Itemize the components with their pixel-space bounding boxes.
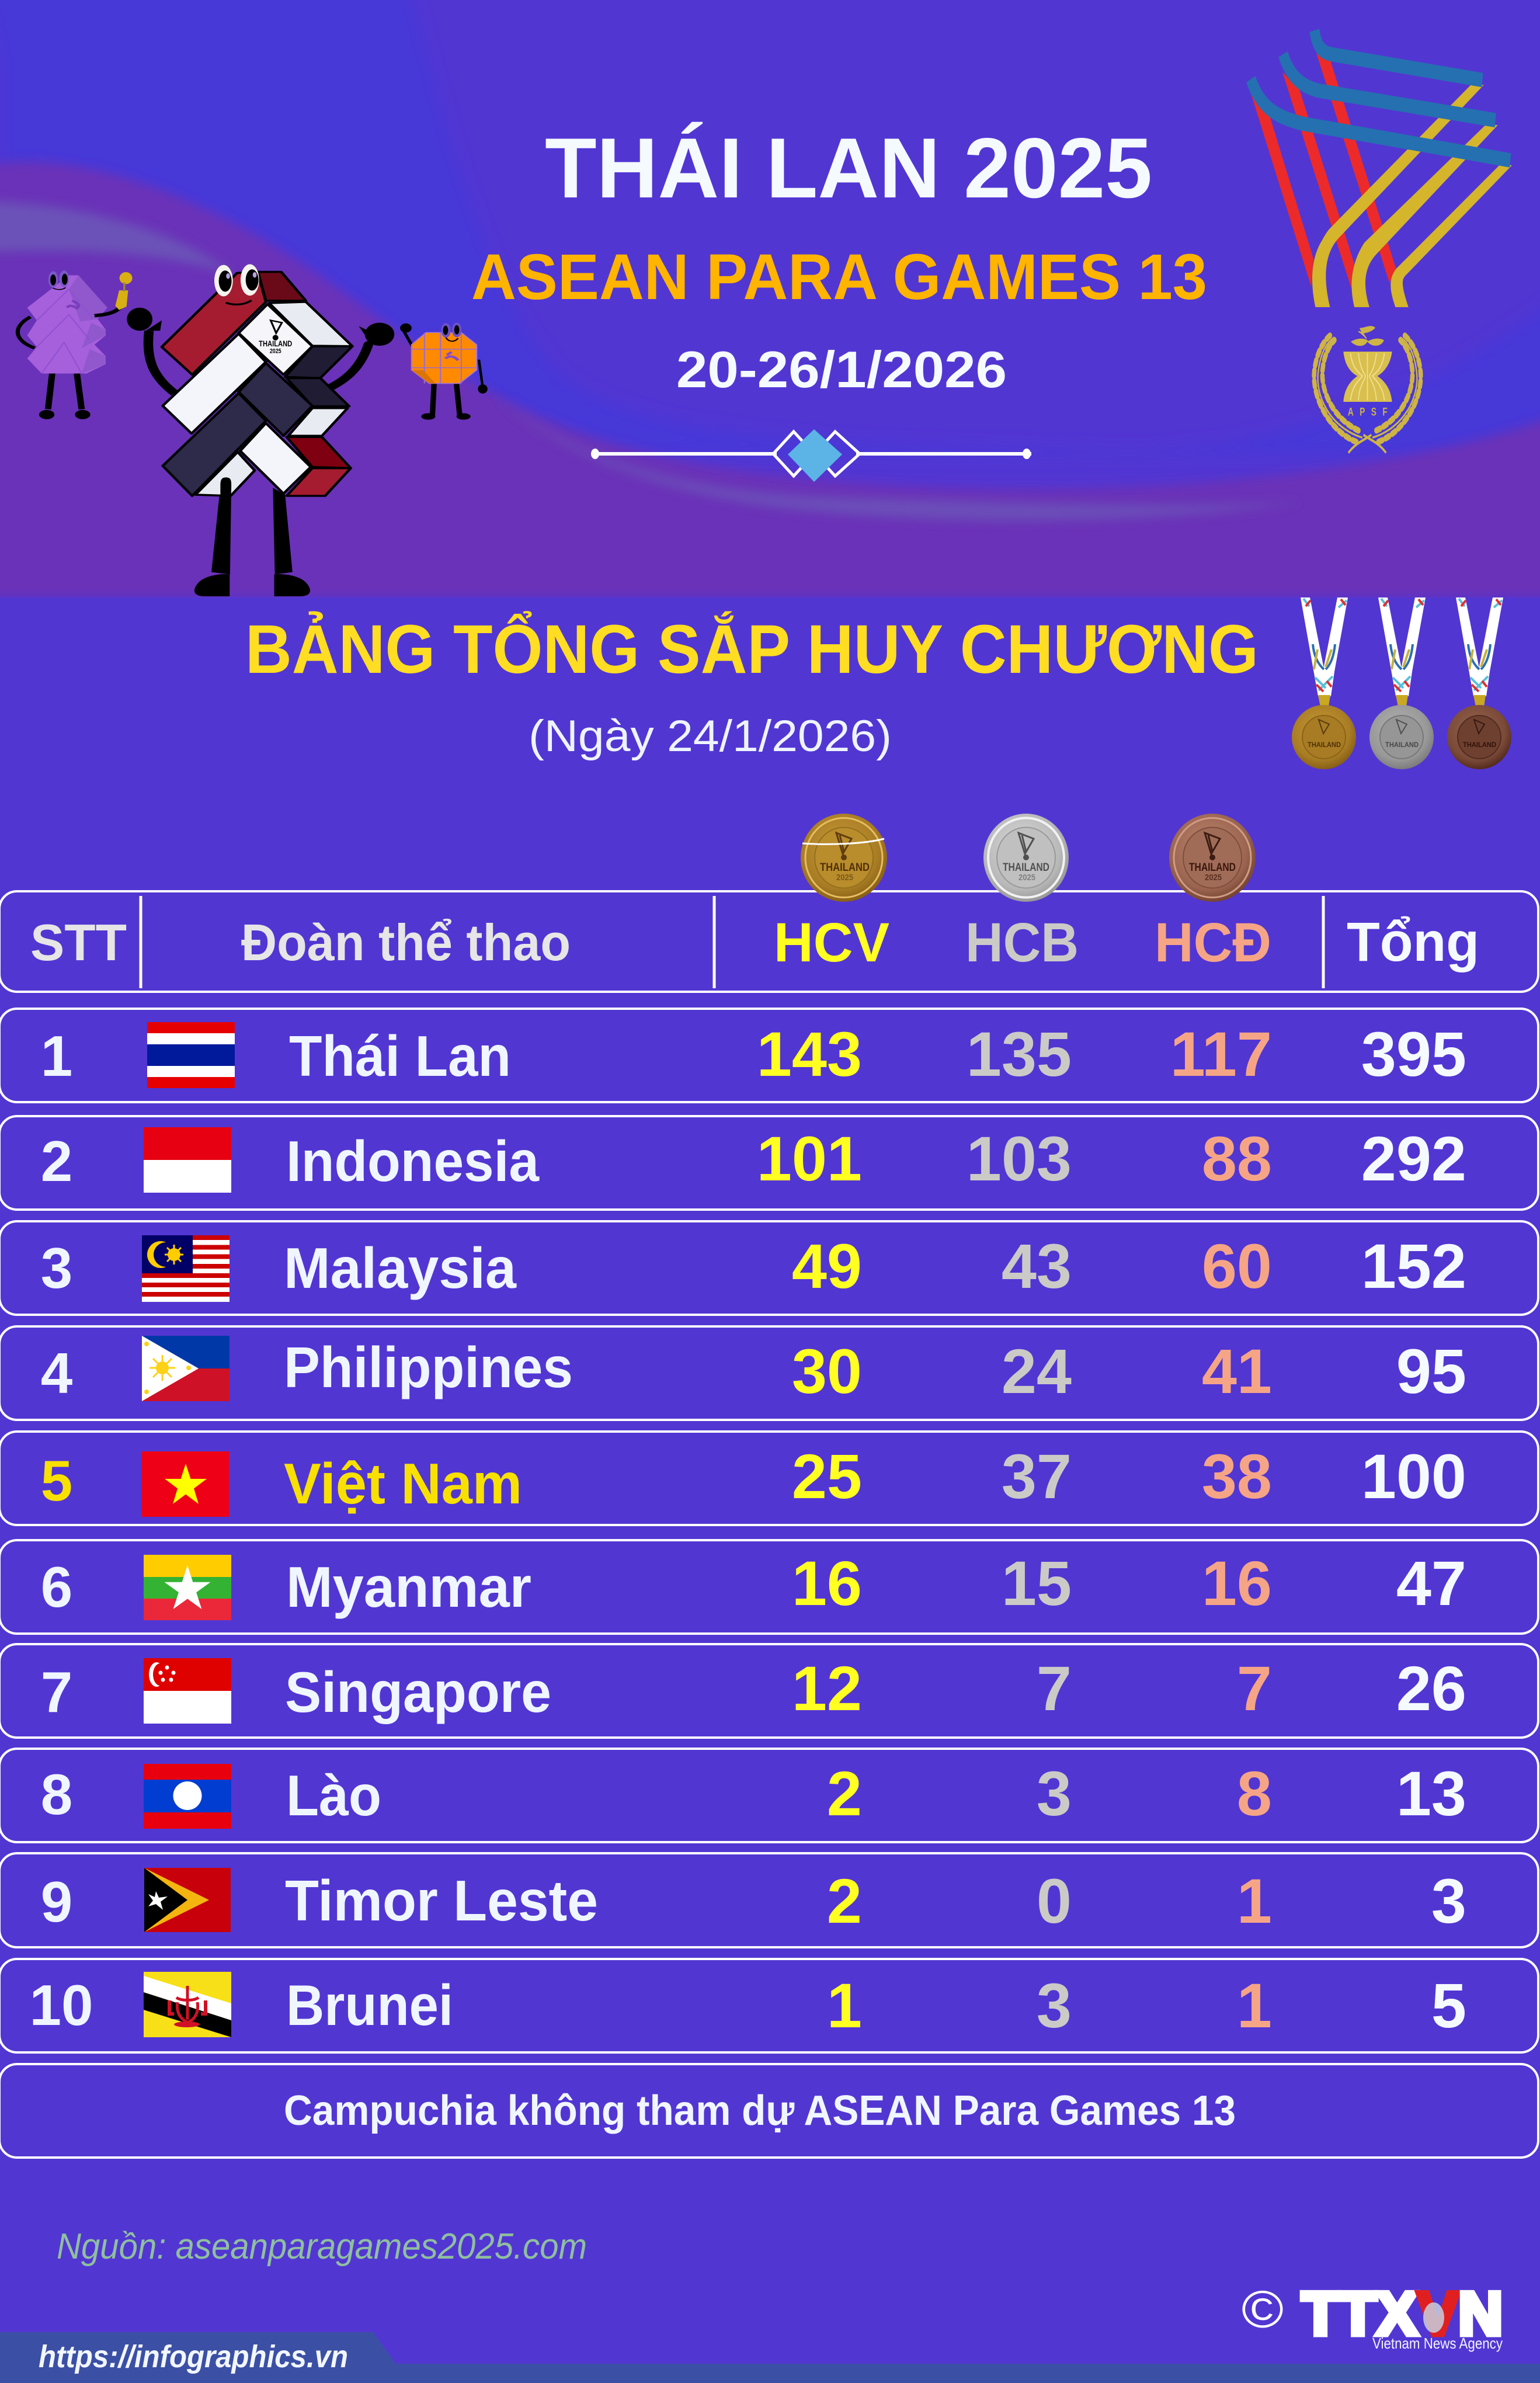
icon: right orange mascot bbox=[400, 322, 488, 420]
flag: Indonesia bbox=[144, 1127, 231, 1193]
row 8: Lào: 8 bbox=[41, 1762, 72, 1826]
flag: Vietnam bbox=[141, 1451, 229, 1517]
row 1: Thái Lan: Thái Lan bbox=[289, 1024, 511, 1088]
table header row: Đoàn thể thao bbox=[241, 913, 571, 971]
row 3: Malaysia: 60 bbox=[1202, 1231, 1272, 1301]
table header row: HCV bbox=[774, 912, 889, 974]
flag: Singapore bbox=[144, 1658, 231, 1724]
row 4: Philippines bbox=[0, 1326, 1538, 1420]
table header row: HCB bbox=[965, 912, 1079, 974]
row 5: Việt Nam (highlighted): Việt Nam bbox=[284, 1451, 522, 1516]
icon: Thailand 2025 games logo bbox=[1251, 30, 1512, 307]
date note: (Ngày 24/1/2026) bbox=[529, 711, 892, 761]
flag: Timor Leste bbox=[144, 1868, 231, 1932]
row 10: Brunei: 1 bbox=[827, 1970, 862, 2041]
row 4: Philippines: 4 bbox=[41, 1341, 72, 1405]
row 10: Brunei: 5 bbox=[1431, 1970, 1466, 2041]
icon: hanging silver medal bbox=[1369, 598, 1434, 769]
row 7: Singapore bbox=[0, 1644, 1538, 1738]
icon: hanging silver medal: THAILAND bbox=[1385, 741, 1419, 749]
row 1: Thái Lan: 143 bbox=[757, 1019, 862, 1089]
row 4: Philippines: 95 bbox=[1396, 1336, 1466, 1406]
icon: hanging gold medal bbox=[1292, 598, 1356, 769]
row 8: Lào bbox=[0, 1749, 1538, 1842]
table header row: STT bbox=[30, 913, 127, 971]
flag: Malaysia bbox=[142, 1235, 230, 1302]
row 1: Thái Lan: 395 bbox=[1361, 1019, 1466, 1089]
icon: APSF wreath emblem: APSF bbox=[1348, 405, 1388, 418]
row 5: Việt Nam (highlighted) bbox=[0, 1432, 1538, 1525]
row 9: Timor Leste bbox=[0, 1853, 1538, 1947]
table header row: Tổng bbox=[1347, 911, 1479, 973]
icon: silver medal: 2025 bbox=[1018, 873, 1035, 883]
row 10: Brunei: 3 bbox=[1037, 1970, 1072, 2041]
row 7: Singapore: 7 bbox=[41, 1660, 72, 1724]
icon: hanging bronze medal bbox=[1447, 598, 1511, 769]
row 6: Myanmar: 6 bbox=[41, 1555, 72, 1619]
icon: hanging bronze medal: THAILAND bbox=[1463, 741, 1496, 749]
row 5: Việt Nam (highlighted): 25 bbox=[792, 1441, 862, 1512]
flag: Brunei bbox=[144, 1972, 231, 2037]
row 5: Việt Nam (highlighted): 100 bbox=[1361, 1441, 1466, 1512]
row 2: Indonesia: 2 bbox=[41, 1129, 72, 1193]
header banner background with waves bbox=[0, 0, 1540, 598]
divider ornament bbox=[591, 429, 1031, 482]
row 7: Singapore: Singapore bbox=[285, 1660, 551, 1724]
row 8: Lào: Lào bbox=[286, 1763, 381, 1828]
icon: silver medal: THAILAND bbox=[1003, 862, 1049, 874]
row 8: Lào: 8 bbox=[1237, 1758, 1272, 1829]
row 10: Brunei: Brunei bbox=[286, 1973, 453, 2037]
flag: Thailand bbox=[147, 1022, 235, 1088]
row 5: Việt Nam (highlighted): 38 bbox=[1202, 1441, 1272, 1512]
icon: gold medal: 2025 bbox=[836, 873, 853, 883]
row 8: Lào: 3 bbox=[1037, 1758, 1072, 1829]
row 2: Indonesia: 103 bbox=[967, 1123, 1072, 1194]
row 10: Brunei: 10 bbox=[29, 1973, 93, 2037]
note row: Campuchia không tham dự ASEAN Para Games 13 bbox=[284, 2087, 1236, 2134]
row 9: Timor Leste: 0 bbox=[1037, 1866, 1072, 1936]
row 1: Thái Lan: 117 bbox=[1170, 1019, 1272, 1089]
row 9: Timor Leste: 2 bbox=[827, 1866, 862, 1936]
icon: gold medal: THAILAND bbox=[820, 862, 870, 874]
row 2: Indonesia: 88 bbox=[1202, 1123, 1272, 1194]
icon: main mascot: THAILAND bbox=[259, 340, 292, 348]
icon: bronze medal: THAILAND bbox=[1189, 862, 1236, 874]
row 3: Malaysia: 3 bbox=[41, 1236, 72, 1300]
row 9: Timor Leste: 9 bbox=[41, 1870, 72, 1934]
row 10: Brunei bbox=[0, 1959, 1538, 2052]
row 8: Lào: 13 bbox=[1396, 1758, 1466, 1829]
table header row: HCĐ bbox=[1155, 912, 1271, 974]
flag: Laos bbox=[144, 1764, 231, 1829]
row 10: Brunei: 1 bbox=[1237, 1970, 1272, 2041]
TTXVN logo: © bbox=[1242, 2281, 1284, 2339]
source: Nguồn: aseanparagames2025.com bbox=[57, 2226, 587, 2267]
icon: silver medal bbox=[983, 814, 1069, 902]
row 9: Timor Leste: 1 bbox=[1237, 1866, 1272, 1936]
row 4: Philippines: 41 bbox=[1202, 1336, 1272, 1406]
row 6: Myanmar: 47 bbox=[1396, 1548, 1466, 1618]
icon: gold medal bbox=[801, 814, 887, 902]
row 2: Indonesia bbox=[0, 1116, 1538, 1210]
website url: https://infographics.vn bbox=[39, 2339, 348, 2374]
icon: main mascot bbox=[127, 264, 394, 596]
row 6: Myanmar: 16 bbox=[1202, 1548, 1272, 1618]
row 6: Myanmar: 15 bbox=[1002, 1548, 1072, 1618]
row 1: Thái Lan: 135 bbox=[967, 1019, 1072, 1089]
row 2: Indonesia: Indonesia bbox=[286, 1129, 540, 1193]
footer band bbox=[0, 2332, 1540, 2383]
subtitle: games name: ASEAN PARA GAMES 13 bbox=[471, 241, 1207, 313]
TTXVN logo: TTXVN bbox=[1302, 2280, 1503, 2348]
row 5: Việt Nam (highlighted): 37 bbox=[1002, 1441, 1072, 1512]
flag: Philippines bbox=[142, 1336, 230, 1401]
row 6: Myanmar: Myanmar bbox=[286, 1555, 531, 1619]
row 4: Philippines: Philippines bbox=[284, 1335, 573, 1399]
table header row bbox=[0, 891, 1538, 992]
row 6: Myanmar bbox=[0, 1540, 1538, 1634]
row 7: Singapore: 7 bbox=[1237, 1653, 1272, 1724]
TTXVN logo: Vietnam News Agency bbox=[1372, 2335, 1503, 2352]
row 6: Myanmar: 16 bbox=[792, 1548, 862, 1618]
dates: 20-26/1/2026 bbox=[676, 341, 1007, 398]
row 7: Singapore: 26 bbox=[1396, 1653, 1466, 1724]
row 9: Timor Leste: 3 bbox=[1431, 1866, 1466, 1936]
row 3: Malaysia: 43 bbox=[1002, 1231, 1072, 1301]
section heading: BẢNG TỔNG SẮP HUY CHƯƠNG bbox=[245, 610, 1259, 688]
row 8: Lào: 2 bbox=[827, 1758, 862, 1829]
row 1: Thái Lan bbox=[0, 1009, 1538, 1102]
row 4: Philippines: 30 bbox=[792, 1336, 862, 1406]
row 7: Singapore: 12 bbox=[792, 1653, 862, 1724]
flag: Myanmar bbox=[144, 1555, 231, 1620]
icon: left purple mascot bbox=[18, 270, 133, 419]
row 3: Malaysia: 49 bbox=[792, 1231, 862, 1301]
row 2: Indonesia: 292 bbox=[1361, 1123, 1466, 1194]
icon: main mascot: 2025 bbox=[270, 347, 281, 355]
row 1: Thái Lan: 1 bbox=[41, 1024, 72, 1088]
title: THÁI LAN 2025 bbox=[545, 120, 1152, 216]
icon: APSF wreath emblem bbox=[1314, 326, 1421, 453]
row 3: Malaysia bbox=[0, 1221, 1538, 1315]
icon: hanging gold medal: THAILAND bbox=[1308, 741, 1341, 749]
icon: bronze medal bbox=[1169, 814, 1256, 902]
row 2: Indonesia: 101 bbox=[757, 1123, 862, 1194]
icon: bronze medal: 2025 bbox=[1205, 873, 1222, 883]
row 3: Malaysia: 152 bbox=[1361, 1231, 1466, 1301]
row 4: Philippines: 24 bbox=[1002, 1336, 1072, 1406]
row 5: Việt Nam (highlighted): 5 bbox=[41, 1448, 72, 1513]
note row bbox=[0, 2064, 1538, 2158]
row 7: Singapore: 7 bbox=[1037, 1653, 1072, 1724]
row 9: Timor Leste: Timor Leste bbox=[285, 1868, 598, 1933]
row 3: Malaysia: Malaysia bbox=[284, 1236, 517, 1300]
